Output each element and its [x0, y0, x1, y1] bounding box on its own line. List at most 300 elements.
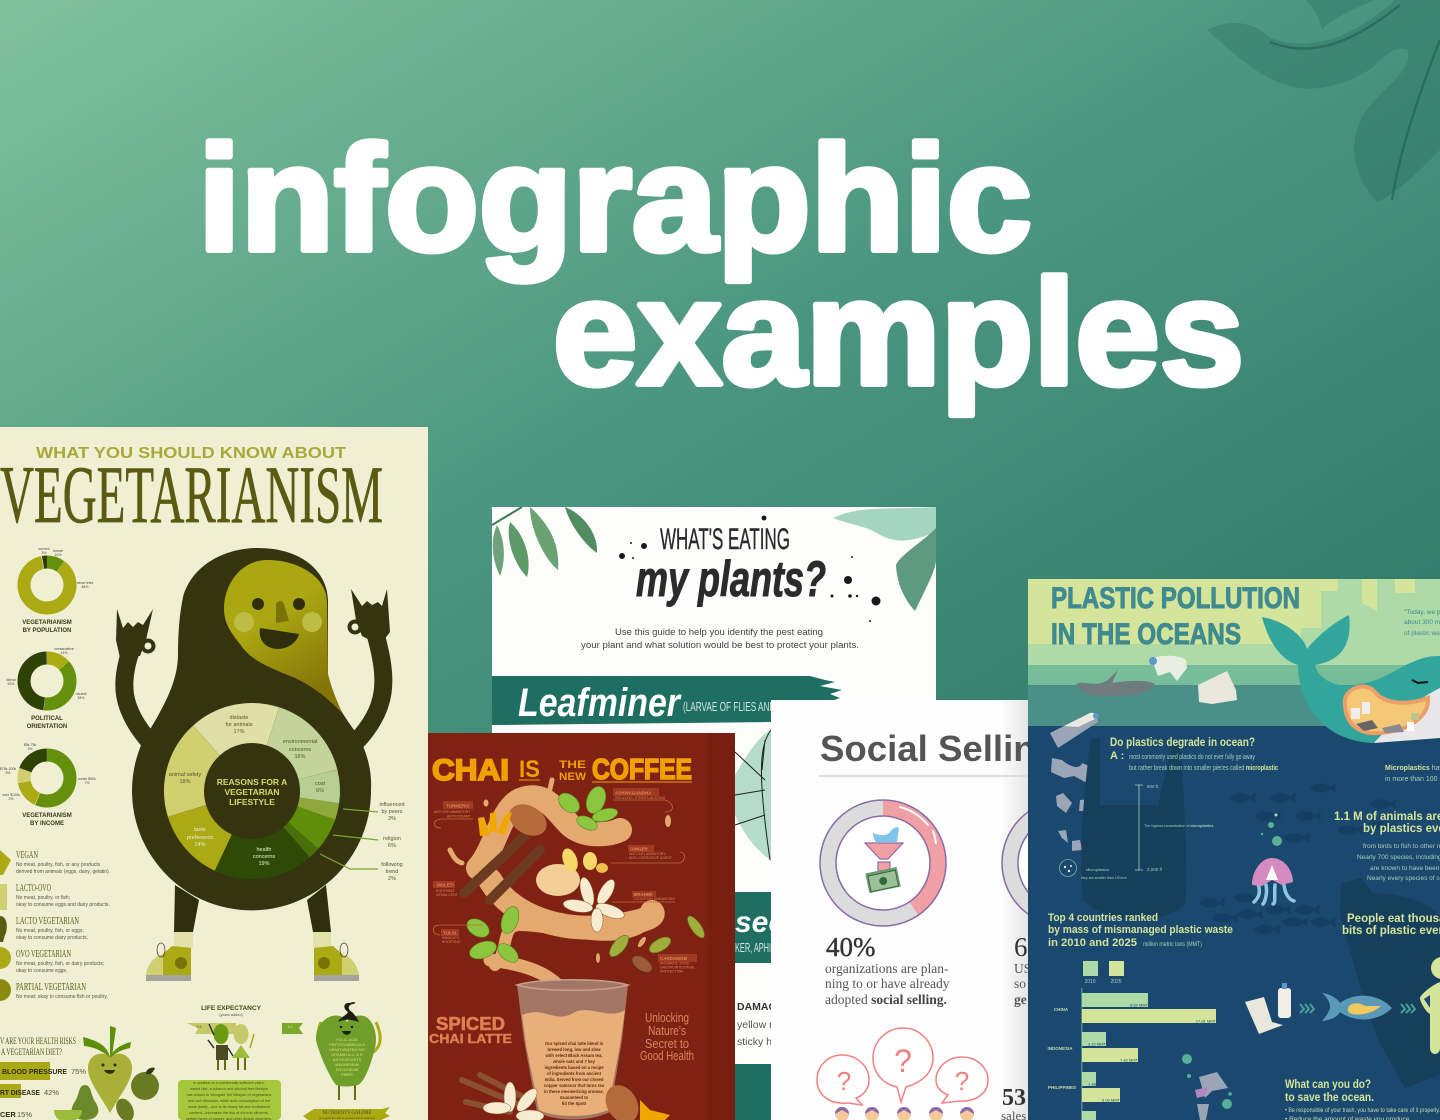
heading: people eat thousands — [1342, 913, 1440, 937]
ingredient labels: DEMULCENT — [436, 893, 459, 897]
icon: bowl — [54, 1110, 82, 1120]
stat: second, partly hidden: US — [1014, 961, 1031, 976]
health risks heading: V ARE YOUR HEALTH RISKS — [0, 1036, 76, 1046]
gray bag — [1076, 670, 1155, 696]
legs — [174, 885, 331, 932]
teal band: insect section: sec — [735, 906, 785, 939]
right hand ring — [350, 622, 360, 632]
heading: the new: NEW — [559, 771, 587, 783]
donut labels: income: over $100k — [2, 793, 20, 797]
microplastics callout: Microplastics — [1086, 867, 1109, 872]
pepper nutrient text: PHYTOCHEMICALS — [329, 1043, 365, 1047]
bar labels: 75% — [71, 1067, 86, 1076]
bar values: 1.88 — [1088, 1082, 1097, 1086]
left hand — [116, 609, 153, 658]
glass text: Guaranteed to — [560, 1095, 589, 1100]
icon: bean — [113, 1096, 137, 1120]
question text: do plastics degrade: Do plastics degrade in ocean? — [1110, 737, 1255, 749]
list: vegetarian types: No meat; okay to consume fish or poultry. — [16, 994, 108, 1000]
title: plastic pollution: PLASTIC POLLUTION — [1051, 582, 1300, 615]
donut labels: income — [0, 743, 96, 801]
arrow: chevrons — [1401, 1004, 1415, 1013]
callout labels: influenced — [379, 802, 405, 808]
bar values: 3.22 MMT — [1088, 1042, 1107, 1046]
pie labels: 6% — [316, 788, 324, 794]
ink splatters — [619, 516, 880, 622]
ingredient labels: PROTECTION — [660, 970, 683, 974]
life expectancy subtitle: (years added) — [219, 1013, 243, 1017]
donut labels: population: 3% — [41, 551, 47, 555]
heading: coffee: COFFEE — [592, 754, 692, 786]
ingredient labels: TURMERIC — [446, 804, 470, 808]
panel: chai is the new coffee — [428, 733, 735, 1120]
stat: second, partly hidden: so — [1014, 976, 1026, 991]
damage text: sticky h — [737, 1036, 772, 1048]
arms — [124, 636, 383, 742]
stat: 40%: 40% — [826, 932, 876, 962]
illustration: bottom spices — [462, 1075, 670, 1120]
pie labels: animal safety — [169, 772, 201, 778]
pie labels: taste — [194, 827, 206, 833]
ingredient labels — [433, 788, 697, 974]
life expectancy text block: content—increases the risk of chronic ailments, — [189, 1111, 269, 1115]
donut labels: political: 52% — [7, 682, 15, 686]
fragment — [1051, 758, 1095, 782]
intro text — [581, 627, 859, 651]
callout labels: religion — [383, 836, 401, 842]
donut title: income — [22, 812, 72, 825]
pepper legs — [339, 1082, 355, 1100]
sinking bottle — [1050, 713, 1098, 748]
flag left: 9.5 — [197, 1025, 201, 1029]
brush banner: leafminer — [492, 676, 842, 725]
bottle silhouette — [1340, 878, 1440, 1088]
illustration: lower leaves — [464, 904, 522, 966]
illustration: turmeric root — [478, 798, 552, 842]
fragment — [1056, 793, 1090, 813]
heading: top 4 countries — [1048, 912, 1233, 949]
title: in the oceans: IN THE OCEANS — [1051, 618, 1241, 651]
glass text — [544, 1041, 605, 1106]
callout lines — [433, 800, 684, 935]
food chain: person — [1420, 957, 1440, 1054]
icon: twitter bird — [873, 827, 899, 842]
list: vegetarian types: derived from animals (eggs, dairy, gelatin). — [16, 869, 110, 875]
ovo vegetarian: OVO VEGETARIAN — [16, 948, 71, 960]
body — [132, 548, 371, 910]
donut labels: political: neutral — [76, 692, 87, 696]
panel: vegetarianism poster — [0, 427, 428, 1120]
illustration: licorice sticks — [464, 833, 540, 900]
glass text: hit the Spot! — [562, 1101, 586, 1106]
arrow: chevrons — [1300, 1004, 1314, 1013]
ingredient labels: SOOTHING — [436, 889, 455, 893]
water bands — [1028, 644, 1440, 1120]
heading: what you should know about: WHAT YOU SHOULD KNOW ABOUT — [36, 445, 346, 462]
bar chart: mismanaged plastic — [1047, 988, 1217, 1120]
bar labels: CER — [0, 1110, 16, 1119]
lower teal strip — [492, 1064, 936, 1120]
ingredient labels: AROMATIC SPICE — [660, 962, 690, 966]
damage text: DAMAG — [737, 1001, 777, 1013]
cheeks — [234, 612, 322, 632]
donut labels: population: current — [39, 547, 49, 551]
pie labels: distaste — [230, 715, 248, 721]
illustration: ginger — [536, 846, 608, 896]
glass text: copper samovar that turns tea — [544, 1083, 605, 1088]
donut labels: income: 9% — [5, 771, 11, 775]
text: unlocking nature's secret — [640, 1010, 694, 1063]
plastic bag silhouette — [1081, 738, 1186, 919]
pie labels: 18% — [179, 779, 191, 785]
section: life expectancy — [178, 1005, 303, 1120]
callout labels: following — [381, 862, 403, 868]
stat: second, partly hidden — [1014, 932, 1031, 1007]
donut title: population: VEGETARIANISM — [22, 620, 72, 626]
donut labels: income: 7% — [84, 781, 90, 785]
life expectancy text block: and curb illnesses, while avid consumption of red — [188, 1099, 270, 1103]
nutrients ribbon — [303, 1107, 390, 1120]
figure: woman — [232, 1024, 254, 1070]
depth scale: 600 ft — [1147, 784, 1159, 789]
illustration: glass of chai — [517, 980, 628, 1120]
bar chart legend: 2010 — [1084, 979, 1096, 985]
donut title: political — [27, 716, 67, 728]
donut labels: population: former — [53, 549, 64, 553]
question marks: ? — [955, 1066, 969, 1096]
decorative leaf, top right — [1207, 0, 1440, 202]
panel: what's eating my plants — [492, 507, 936, 1120]
question marks: ? — [894, 1043, 912, 1079]
shoes — [146, 943, 359, 981]
bar labels — [0, 1067, 86, 1119]
pie labels: 19% — [258, 861, 270, 867]
face — [224, 560, 343, 714]
nose — [276, 601, 289, 623]
pie labels: cost — [315, 781, 326, 787]
heading: my plants: my plants? — [636, 551, 826, 607]
callout labels: trend — [386, 869, 398, 875]
callout lines — [320, 809, 378, 869]
list: vegetarian types: okay to consume eggs. — [16, 968, 67, 974]
bar values: 8.82 MMT — [1130, 1002, 1149, 1008]
pie center label: REASONS FOR A — [217, 777, 287, 787]
donut labels: political: 34% — [77, 696, 85, 700]
call to action: what can you do — [1285, 1079, 1440, 1120]
question text: do plastics degrade — [1110, 737, 1278, 772]
pie labels: for animals — [226, 722, 253, 728]
donut title: political: POLITICAL — [31, 716, 63, 722]
health risks heading line 2: A VEGETARIAN DIET? — [1, 1047, 62, 1057]
pie center label — [217, 779, 287, 805]
whale belly — [1374, 688, 1440, 743]
teal band: insect section — [735, 892, 785, 963]
pepper arms — [318, 1022, 380, 1055]
pepper nutrient text: ANTIOXIDANTS — [333, 1058, 362, 1062]
life expectancy text block — [178, 1080, 281, 1120]
donut chart: income — [16, 747, 78, 809]
glass text: brewed long, low and slow — [547, 1047, 601, 1052]
text: unlocking nature's secret: Nature's — [648, 1023, 686, 1038]
life expectancy text block: based diet, a tobacco and alcohol-free lifestyle — [190, 1087, 268, 1091]
figure: man — [208, 1024, 233, 1070]
bar labels: 15% — [17, 1110, 32, 1119]
flag right: 6.1 — [288, 1025, 292, 1029]
stat text: 40%: adopted social selling. — [825, 992, 947, 1007]
cup — [1198, 671, 1237, 704]
icon: pear — [72, 1085, 98, 1120]
text: spiced chai latte: SPICED — [436, 1014, 505, 1034]
socks — [174, 932, 331, 948]
intro text: your plant and what solution would be best to protect your plants. — [581, 640, 859, 651]
pepper body — [316, 1015, 376, 1086]
donut title: income: VEGETARIANISM — [22, 813, 72, 819]
heading: vegetarianism: VEGETARIANISM — [0, 449, 383, 540]
stat: 53%: 53 — [1002, 1085, 1026, 1111]
stat text: 40%: organizations are plan- — [825, 961, 949, 976]
nutrients ribbon: NUTRIENTS GALORE — [322, 1111, 372, 1116]
partial vegetarian: PARTIAL VEGETARIAN — [16, 981, 86, 993]
bar labels: 42% — [44, 1088, 59, 1097]
pepper nutrient text: UNSATURATED FAT — [329, 1048, 366, 1052]
depth scale: 2,000 ft — [1147, 867, 1163, 872]
list: vegetarian types: No meat, poultry, fish, or any products — [16, 862, 101, 868]
list: vegetarian types: No meat, poultry, fish, or dairy products; — [16, 961, 104, 967]
pie center label: LIFESTYLE — [229, 797, 275, 807]
ring chart: second, partly hidden — [1002, 800, 1128, 926]
ingredient labels: RELAXING, STRESS-BUSTING — [615, 796, 666, 800]
quote text — [1404, 609, 1440, 637]
country labels — [1047, 1007, 1076, 1090]
text: unlocking nature's secret: Secret to — [645, 1036, 689, 1051]
damage text — [737, 1001, 777, 1048]
brush banner: leafminer: (LARVAE OF FLIES AND MOTHS) — [683, 699, 810, 714]
bar values: 17.81 MMT — [1196, 1018, 1217, 1024]
donut title: income: BY INCOME — [30, 821, 64, 827]
heading: top 4 countries: million metric tons (MMT) — [1143, 941, 1202, 948]
ingredient labels: ANTI-INFLAMMATORY — [629, 852, 666, 856]
glass text: Our spiced chai latte blend is — [545, 1041, 604, 1046]
heading: chai: CHAI — [432, 754, 509, 787]
donut labels: political — [6, 647, 87, 700]
stat: second, partly hidden: ge — [1014, 992, 1027, 1007]
donut labels: population: 84% — [81, 585, 89, 589]
ingredient labels: ASHWAGANDHA — [615, 790, 652, 796]
floating trash — [1076, 656, 1237, 704]
donut labels: population — [39, 547, 93, 589]
call to action: what can you do: What can you do? — [1285, 1079, 1371, 1091]
microplastics callout: they are smaller than 1/5 inch — [1081, 876, 1127, 880]
life expectancy heading: LIFE EXPECTANCY — [201, 1005, 262, 1012]
trash near chart — [1195, 1072, 1228, 1120]
bar values: 5.09 MMT — [1102, 1098, 1121, 1102]
fragment — [1058, 830, 1082, 851]
ingredient labels: ANTIOXIDANT — [447, 814, 471, 818]
list: vegetarian types: okay to consume dairy products. — [16, 935, 88, 941]
glass text: with select Black Assam tea, — [545, 1053, 602, 1058]
stat: second, partly hidden: 6 — [1014, 932, 1028, 962]
pepper nutrient text: FOLIC ACID — [336, 1038, 358, 1042]
list: vegetarian types — [0, 849, 110, 1001]
bar chart legend — [1083, 961, 1124, 985]
lacto vegetarian: LACTO VEGETARIAN — [16, 915, 79, 927]
donut chart: population — [18, 556, 77, 614]
donut chart: political orientation — [17, 652, 76, 710]
ingredient labels: BRAHMI — [634, 892, 652, 897]
pepper nutrient text: MAGNESIUM — [335, 1063, 359, 1067]
bar labels: RT DISEASE — [0, 1088, 40, 1097]
pepper nutrient text: VITAMIN A,C, & E — [331, 1053, 363, 1057]
glass text: India. Served from our closed — [545, 1077, 604, 1082]
whale eye — [1412, 680, 1428, 683]
illustration: cardamom pods — [606, 913, 708, 975]
text: spiced chai latte — [429, 1014, 512, 1046]
heading: top 4 countries: Top 4 countries ranked — [1048, 912, 1158, 924]
donut labels: population: never tried — [77, 581, 93, 585]
pie labels — [169, 715, 326, 867]
bars — [0, 1062, 50, 1098]
donut title: political: ORIENTATION — [27, 724, 67, 730]
illustration: top leaves — [555, 784, 619, 833]
donut labels: income: $75k-100k — [0, 767, 16, 771]
fish school — [1199, 783, 1396, 934]
donut labels: political: conservative — [54, 647, 74, 651]
pepper nutrient text — [329, 1038, 366, 1077]
title line 2: examples — [553, 248, 1244, 416]
ingredient labels: ANTI-INFLAMMATORY — [434, 810, 471, 814]
heading: top 4 countries: in 2010 and 2025 — [1048, 937, 1137, 949]
list: vegetarian types: okay to consume eggs and dairy products. — [16, 902, 110, 908]
bar values — [1088, 1002, 1217, 1102]
glass text: ingredients based on a recipe — [544, 1065, 604, 1070]
ingredient labels: ANTI-CORROSIVE AGENT — [629, 856, 673, 860]
callout labels: 3% — [388, 816, 396, 822]
stat text: 40% — [825, 961, 950, 1007]
ingredient labels: TULSI — [443, 930, 456, 936]
lacto-ovo: LACTO-OVO — [16, 882, 51, 894]
microplastics callout — [1060, 860, 1127, 880]
icon: money — [865, 867, 901, 893]
list: vegetarian types: No meat, poultry, or fish; — [16, 895, 70, 901]
illustrated leaf — [735, 730, 771, 860]
damage text: yellow r — [737, 1019, 773, 1031]
donut labels: income: under $50k — [78, 777, 96, 781]
donut labels: political: 14% — [60, 651, 68, 655]
callout labels: 2% — [388, 876, 396, 882]
glass text: of ingredients from ancient — [547, 1071, 602, 1076]
callout labels: by peers — [381, 809, 403, 815]
watercolor leaves, top right — [833, 507, 936, 611]
question text: do plastics degrade: A : — [1110, 750, 1124, 762]
panel: social selling — [771, 700, 1128, 1120]
teal band: insect section: KER, APHI — [735, 940, 771, 955]
pie labels: 16% — [294, 754, 306, 760]
pepper face — [340, 1026, 353, 1035]
bar labels: BLOOD PRESSURE — [2, 1067, 67, 1076]
heading: is: IS — [519, 756, 540, 783]
ingredient labels: GASTROINTESTINAL — [660, 966, 695, 970]
donut title: population — [22, 620, 72, 632]
food chain: bag and bottle — [1245, 983, 1291, 1034]
donut labels: income: 2% — [8, 797, 14, 801]
divider — [819, 775, 1028, 777]
callout labels: 6% — [388, 843, 396, 849]
icon: funnel — [865, 843, 903, 871]
question bubbles — [817, 1028, 988, 1105]
eyes — [252, 598, 305, 610]
donut title: population: BY POPULATION — [23, 628, 71, 634]
nutrients ribbon: A vegetarian diet is packed full of vitamins — [319, 1116, 375, 1120]
section: bell pepper nutrients — [303, 1002, 390, 1120]
intro text: Use this guide to help you identify the pest eating — [615, 627, 823, 638]
question marks: ? — [837, 1066, 851, 1096]
pie center label: VEGETARIAN — [224, 787, 280, 797]
watercolor leaves, top left — [492, 507, 597, 577]
left hand ring — [142, 640, 154, 652]
heading: the new: THE — [559, 759, 586, 771]
icon: heart radish — [83, 1026, 132, 1113]
vegan: VEGAN — [16, 849, 38, 861]
text: unlocking nature's secret: Unlocking — [645, 1010, 689, 1025]
ingredient labels: MULETI — [437, 882, 454, 888]
pie labels: concerns — [253, 854, 275, 860]
right hand — [351, 589, 390, 639]
section: health risks — [0, 1026, 159, 1120]
ring chart: 40% — [820, 800, 946, 926]
stat text: 40%: ning to or have already — [825, 976, 950, 991]
donut labels: population: 10% — [54, 553, 62, 557]
jellyfish — [1252, 858, 1294, 904]
question marks — [837, 1043, 969, 1096]
text: unlocking nature's secret: Good Health — [640, 1048, 694, 1063]
donut labels: political: liberal — [6, 678, 16, 682]
food chain: fish — [1322, 993, 1392, 1021]
stomach trash — [1351, 702, 1419, 733]
whale stomach — [1345, 687, 1428, 733]
pepper nutrient text: FIBER — [341, 1073, 353, 1077]
country labels: CHINA — [1054, 1007, 1069, 1012]
pie labels: concerns — [289, 747, 311, 753]
heading: social selling: Social Selling — [820, 728, 1058, 769]
pie labels: health — [256, 847, 272, 853]
bubbles near jellyfish — [1182, 814, 1282, 1109]
question text: do plastics degrade: but rather break down into smaller pieces called microplastic — [1129, 765, 1278, 772]
whale — [1262, 615, 1440, 743]
bar chart legend: 2025 — [1110, 979, 1122, 985]
life expectancy text block: meat (beef)—due to its heavy fat and cholesterol — [188, 1105, 270, 1109]
donut labels: income: $5k-75k — [24, 743, 36, 747]
animal facts — [1357, 843, 1440, 882]
pie labels: preference — [187, 835, 213, 841]
life expectancy text block: In addition to a nutritionally sufficient plant- — [193, 1081, 266, 1085]
pepper hair — [338, 1002, 359, 1022]
bar values: 7.42 MMT — [1120, 1058, 1139, 1062]
brush banner: leafminer: Leafminer — [518, 681, 682, 725]
donut labels: income: 2% — [27, 747, 33, 751]
glass text: in these mesmerizing aromas. — [544, 1089, 604, 1094]
illustration: splash streaks — [484, 800, 671, 963]
callout labels — [379, 802, 405, 882]
heading: 1.1 M of animals — [1334, 811, 1440, 835]
icons — [0, 850, 11, 1001]
sinking trash — [1050, 713, 1099, 851]
ingredient labels: CARDAMOM — [660, 956, 687, 961]
pie chart: reasons — [164, 703, 340, 879]
pie labels: 17% — [233, 729, 245, 735]
pie labels: 14% — [194, 842, 206, 848]
glass text: whole oats and 7 key — [552, 1059, 596, 1064]
bottle cap and bag, surface — [1149, 656, 1187, 681]
